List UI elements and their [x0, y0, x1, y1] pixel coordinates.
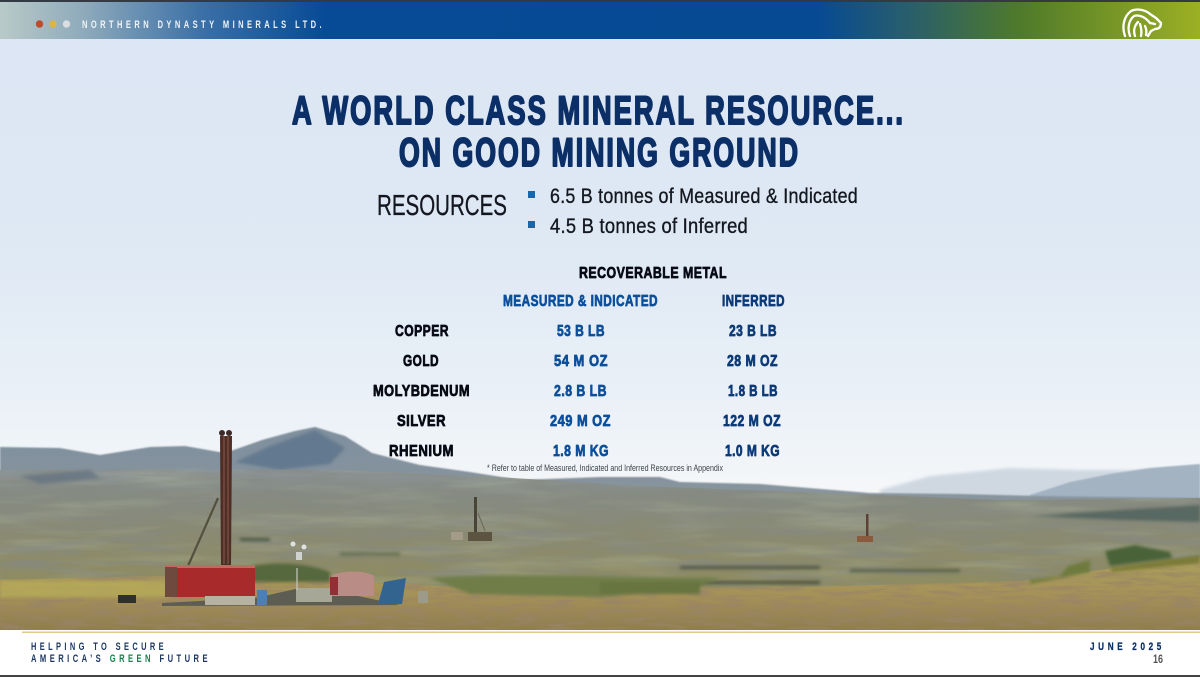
- main drill rig: [118, 430, 428, 606]
- distant drill rig, centre: [451, 497, 492, 541]
- resources bullet list: 6.5 B tonnes of Measured & Indicated: [550, 184, 858, 208]
- row: molybdenum: [373, 383, 778, 400]
- title: A WORLD CLASS MINERAL RESOURCE...: [292, 89, 905, 133]
- row: gold: GOLD: [403, 353, 439, 370]
- column headers: INFERRED: [722, 293, 785, 310]
- title: [292, 89, 905, 175]
- background: sky: [0, 39, 1200, 509]
- column headers: MEASURED & INDICATED: [503, 293, 658, 310]
- page number: 16: [1153, 652, 1163, 666]
- row: rhenium: 1.8 M KG: [553, 443, 609, 460]
- row: copper: 23 B LB: [729, 323, 777, 340]
- row: gold: 54 M OZ: [554, 353, 608, 370]
- row: molybdenum: 1.8 B LB: [728, 383, 778, 400]
- resources label: RESOURCES: [377, 190, 507, 222]
- icon: lion logo: [1123, 10, 1161, 36]
- row: copper: 53 B LB: [557, 323, 605, 340]
- row: rhenium: RHENIUM: [389, 443, 454, 460]
- row: molybdenum: MOLYBDENUM: [373, 383, 470, 400]
- row: rhenium: 1.0 M KG: [725, 443, 780, 460]
- row: copper: COPPER: [395, 323, 449, 340]
- resources bullet list: [528, 184, 858, 238]
- title: ON GOOD MINING GROUND: [399, 131, 800, 175]
- row: silver: [397, 413, 781, 430]
- row: silver: SILVER: [397, 413, 446, 430]
- footer: [0, 630, 1200, 677]
- table heading: RECOVERABLE METAL: [579, 265, 727, 282]
- background: tundra landscape photo: [0, 427, 1200, 631]
- date: JUNE 2025: [1090, 641, 1165, 653]
- tagline: AMERICA’S GREEN FUTURE: [31, 653, 211, 665]
- table: recoverable metal: [373, 265, 785, 460]
- footnote: * Refer to table of Measured, Indicated and Inferred Resources in Appendix: [487, 463, 723, 473]
- header bar: [0, 0, 1200, 39]
- row: silver: 249 M OZ: [550, 413, 611, 430]
- row: molybdenum: 2.8 B LB: [554, 383, 607, 400]
- row: silver: 122 M OZ: [723, 413, 781, 430]
- row: copper: [395, 323, 777, 340]
- resources bullet list: 4.5 B tonnes of Inferred: [550, 214, 748, 238]
- company name: NORTHERN DYNASTY MINERALS LTD.: [82, 19, 325, 31]
- row: gold: 28 M OZ: [727, 353, 778, 370]
- header dots: [36, 20, 70, 28]
- row: gold: [403, 353, 778, 370]
- tagline: HELPING TO SECURE: [31, 641, 167, 653]
- distant drill rig, right: [857, 514, 873, 542]
- tagline: [31, 641, 211, 665]
- row: rhenium: [389, 443, 780, 460]
